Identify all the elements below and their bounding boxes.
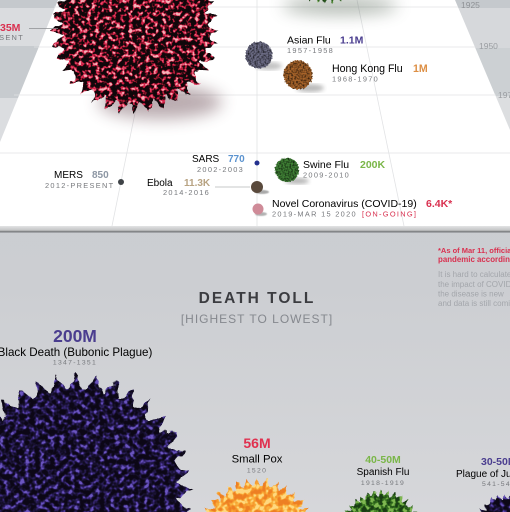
virus ball: Hong Kong Flu [284, 60, 324, 92]
label: Ebola: 2014-2016 [163, 188, 210, 197]
label: COVID-19 [272, 198, 453, 218]
label: COVID-19: 2019-MAR 15 2020 [272, 210, 357, 218]
label: Ebola: Ebola [147, 178, 173, 189]
label: Asian Flu: 1.1M [340, 34, 364, 46]
label: Swine Flu [303, 159, 386, 180]
label: MERS: MERS [54, 170, 83, 181]
year label 1925: 1925 [461, 0, 480, 10]
label: Black Death: 1347-1351 [53, 360, 97, 366]
white floor [0, 0, 510, 226]
label: Small Pox: 1520 [247, 468, 267, 474]
label: COVID-19: [ON-GOING] [362, 210, 417, 218]
right year bands [440, 0, 510, 136]
heading: death toll: [HIGHEST TO LOWEST] [181, 312, 333, 326]
label: Asian Flu: Asian Flu [287, 34, 331, 46]
grid lines [0, 0, 510, 226]
label: MERS: 850 [92, 170, 109, 181]
label: COVID-19: 6.4K* [426, 198, 453, 210]
virus ball: Spanish Flu [334, 485, 428, 512]
year label 1950: 1950 [479, 41, 498, 51]
label: Spanish Flu: 1918-1919 [361, 480, 405, 487]
virus dot: SARS [254, 160, 260, 166]
heading: death toll: DEATH TOLL [199, 290, 315, 307]
label: Spanish Flu [357, 454, 409, 487]
label: COVID-19: Novel Coronavirus (COVID-19) [272, 198, 417, 210]
label: Spanish Flu: Spanish Flu [357, 467, 409, 478]
virus ball: Swine Flu [275, 158, 309, 184]
label: Black Death: 200M [53, 326, 97, 346]
footnote: It is hard to calculate [438, 270, 510, 279]
ball shadow: green [282, 0, 398, 15]
virus ball: Black Death [0, 361, 205, 512]
label: Small Pox [232, 435, 283, 474]
35M label [0, 22, 58, 42]
virus dot: MERS [118, 179, 124, 185]
label: Asian Flu: 1957-1958 [287, 46, 334, 55]
panel: timeline floor [0, 0, 510, 233]
label: MERS [45, 170, 114, 190]
label: Spanish Flu: 40-50M [365, 454, 401, 466]
floor front edge [0, 226, 510, 233]
label: Hong Kong Flu [332, 63, 428, 84]
label: SARS [192, 154, 245, 174]
footnote: the disease is new [438, 290, 504, 298]
label: Ebola [147, 178, 250, 197]
heading: death toll [181, 290, 333, 326]
label: SARS: 770 [228, 154, 245, 165]
footnote [438, 246, 510, 308]
label: Hong Kong Flu: 1M [413, 63, 428, 75]
virus dot: Ebola [251, 181, 269, 194]
label: Swine Flu: Swine Flu [303, 159, 349, 171]
virus ball: top green [274, 0, 376, 9]
label: Hong Kong Flu: Hong Kong Flu [332, 63, 403, 75]
label: Plague of Justinian [456, 456, 510, 488]
virus ball: Small Pox [190, 471, 324, 512]
virus dot: COVID-19 [252, 204, 267, 216]
label: Small Pox: 56M [243, 435, 271, 451]
label: Swine Flu: 2009-2010 [303, 170, 350, 180]
virus ball: Asian Flu [246, 42, 282, 70]
virus ball: Plague of Justinian [465, 488, 510, 512]
left year bands [0, 0, 70, 144]
label: Ebola: 11.3K [184, 178, 211, 189]
label: Asian Flu [287, 34, 364, 55]
label: Hong Kong Flu: 1968-1970 [332, 74, 379, 84]
virus ball: HIV/AIDS [41, 0, 229, 124]
label: Black Death [0, 326, 152, 366]
35M label: 35M [0, 22, 21, 34]
label: Small Pox: Small Pox [232, 454, 283, 466]
label: SARS: 2002-2003 [197, 165, 244, 174]
ball shadow: HIV [98, 85, 222, 119]
label: Swine Flu: 200K [360, 159, 386, 171]
label: SARS: SARS [192, 154, 220, 165]
label: Black Death: Black Death (Bubonic Plague) [0, 346, 152, 359]
label: MERS: 2012-PRESENT [45, 181, 114, 190]
